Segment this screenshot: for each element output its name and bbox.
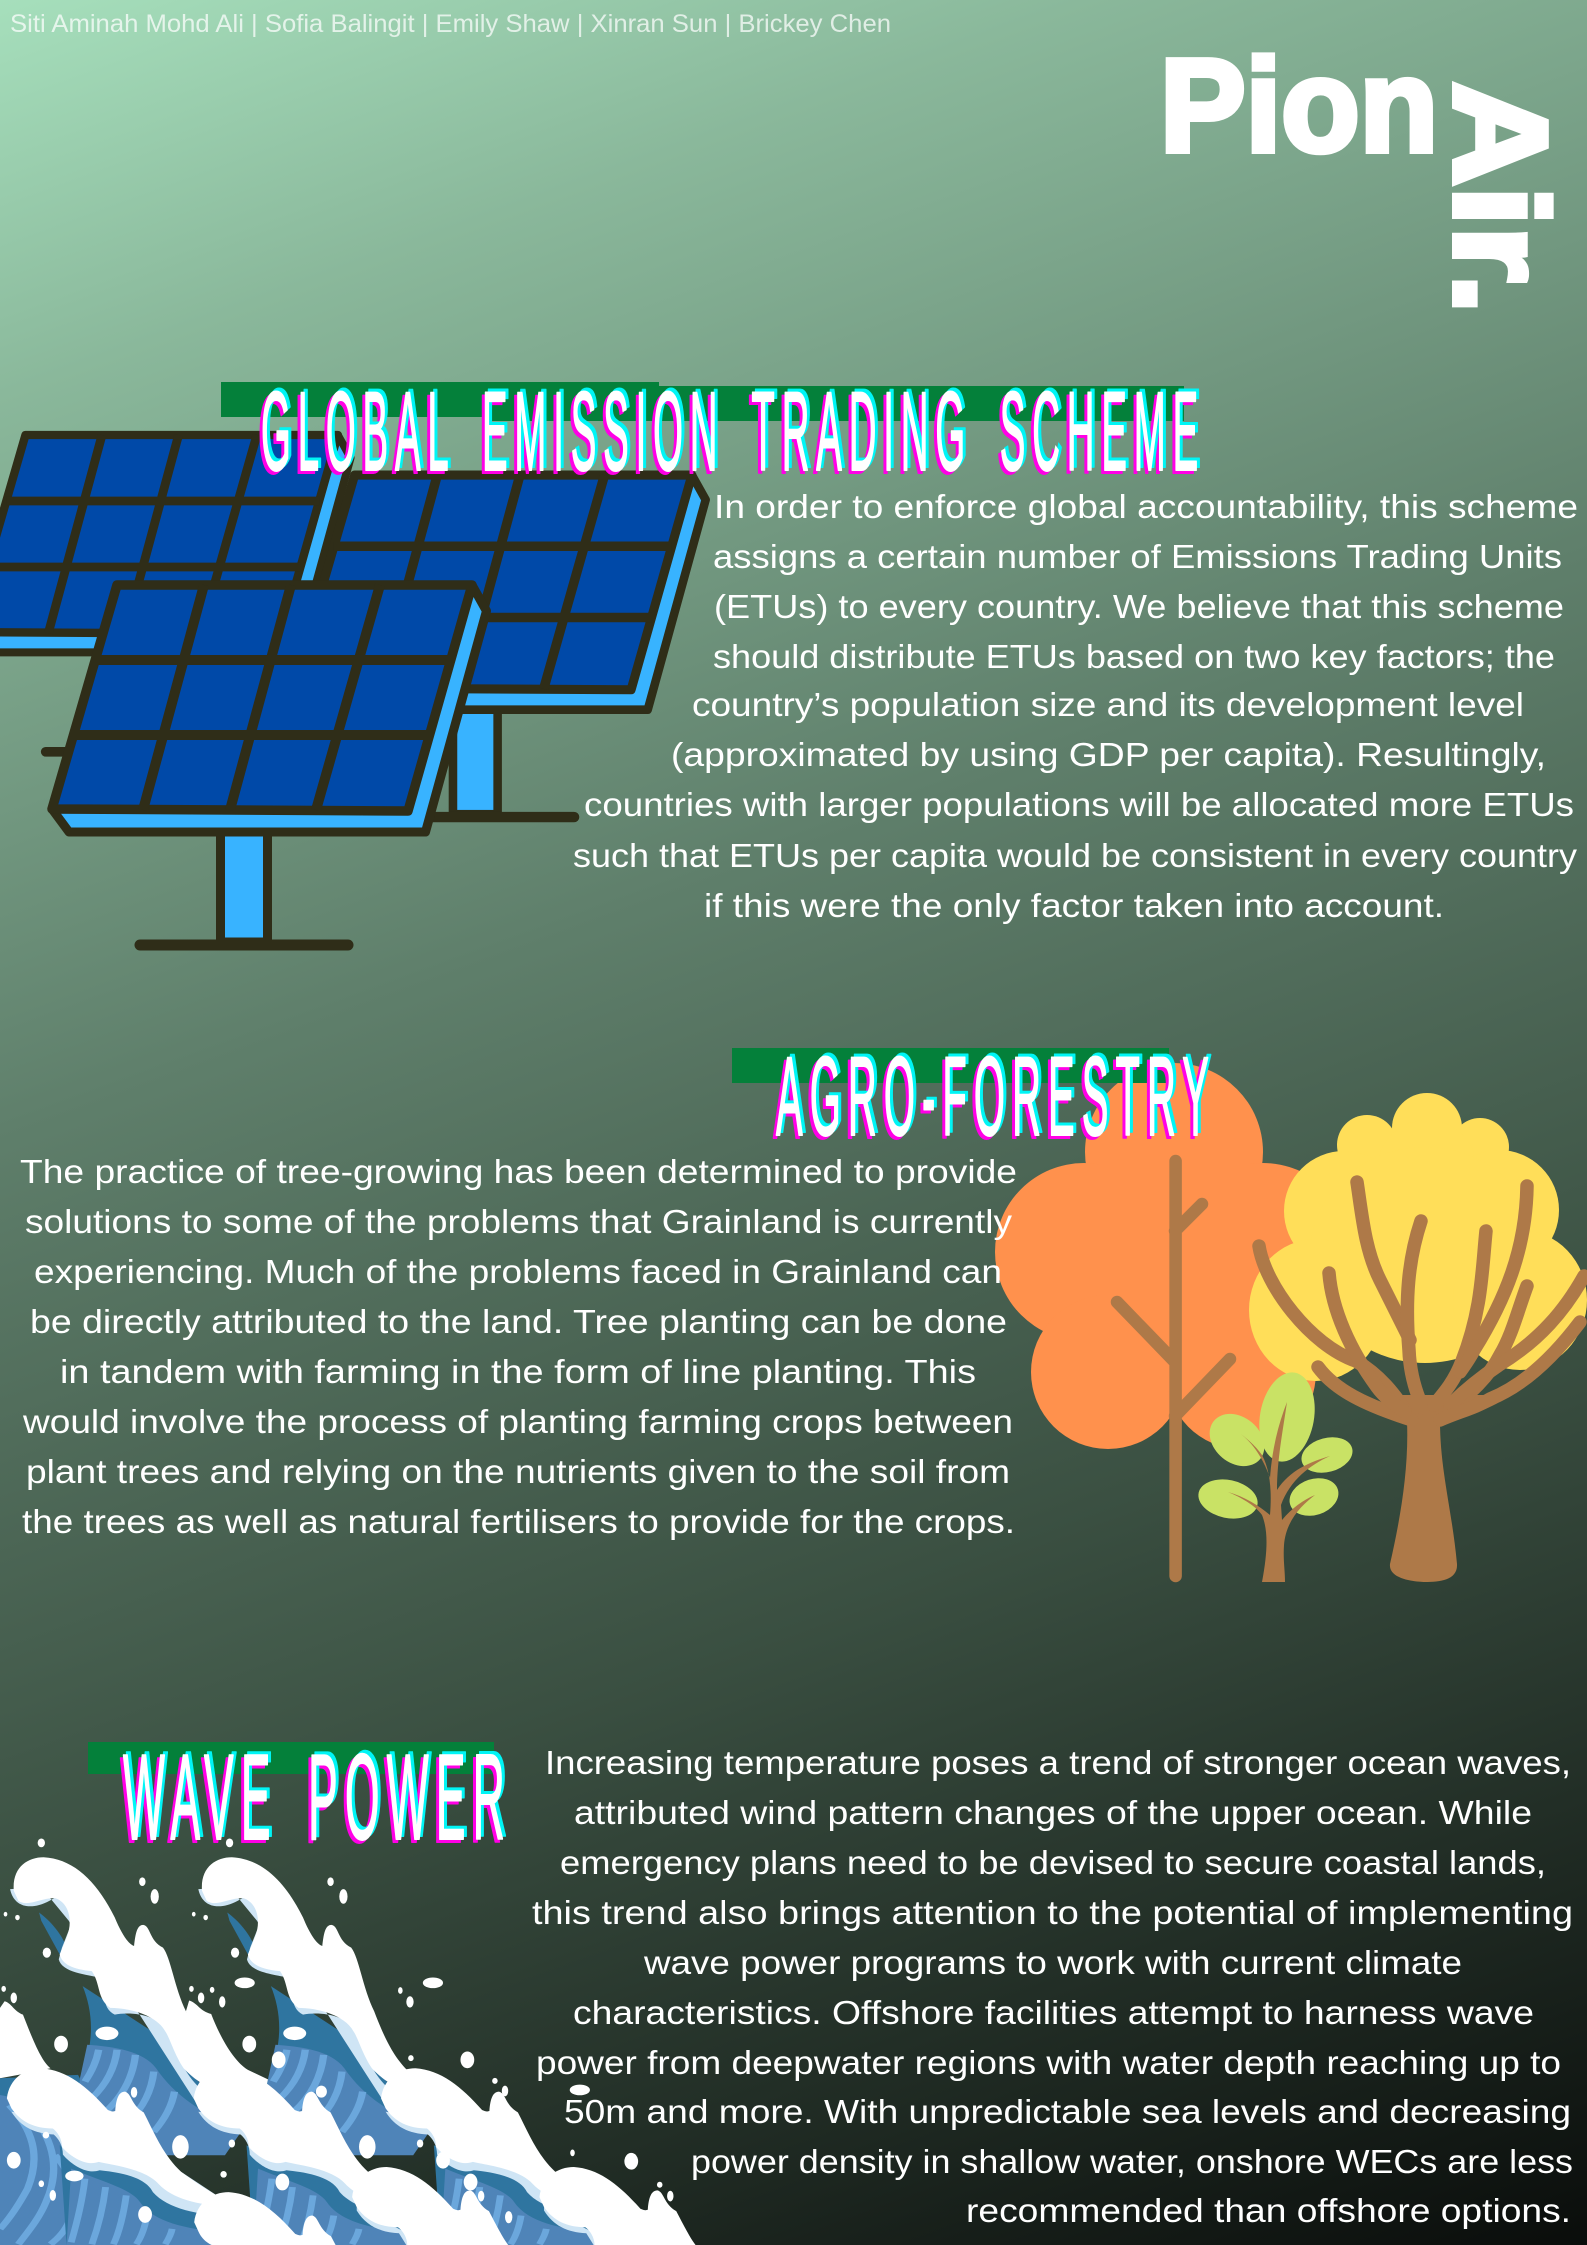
section 1 body text: assigns a certain number of Emissions Trading Units — [713, 538, 1562, 575]
front solar panel — [52, 585, 486, 945]
section 2 body text: be directly attributed to the land. Tree planting can be done — [30, 1303, 1007, 1340]
small plant — [1195, 1368, 1357, 1582]
section 3 body text: characteristics. Offshore facilities attempt to harness wave — [573, 1994, 1534, 2031]
section 1 body text: (ETUs) to every country. We believe that this scheme — [714, 588, 1564, 625]
section 1 body text: countries with larger populations will be allocated more ETUs — [584, 786, 1574, 823]
yellow tree — [1249, 1093, 1587, 1582]
text: WAVE POWER — [123, 1729, 512, 1865]
section 1 body text: (approximated by using GDP per capita). Resultingly, — [671, 736, 1546, 773]
section 3 body text — [532, 1744, 1573, 2229]
illustration: ocean waves — [0, 1839, 696, 2245]
section 3 body text: power density in shallow water, onshore WECs are less — [691, 2143, 1573, 2180]
section 1 heading bar — [221, 382, 1184, 421]
back right solar panel — [293, 475, 706, 817]
section 2 body text: in tandem with farming in the form of line planting. This — [60, 1353, 976, 1390]
section 3 body text: emergency plans need to be devised to secure coastal lands, — [560, 1844, 1546, 1881]
section 1 body text: In order to enforce global accountability, this scheme — [714, 488, 1578, 525]
section 1 body text — [573, 488, 1578, 924]
section 3 body text: power from deepwater regions with water depth reaching up to — [536, 2044, 1561, 2081]
section 1 body text: if this were the only factor taken into account. — [704, 887, 1444, 924]
section 2 body text: the trees as well as natural fertilisers to provide for the crops. — [22, 1503, 1015, 1540]
section 2 body text — [20, 1153, 1017, 1540]
text: WAVE POWER — [126, 1726, 515, 1862]
orange tree — [995, 1063, 1352, 1576]
section 3 body text: this trend also brings attention to the potential of implementing — [532, 1894, 1573, 1931]
section 2 body text: would involve the process of planting farming crops between — [22, 1403, 1013, 1440]
section 3 heading bar — [88, 1742, 494, 1774]
logo title: PionAir. — [1160, 32, 1574, 314]
section 2 body text: experiencing. Much of the problems faced in Grainland can — [34, 1253, 1002, 1290]
logo word: Pion: Pion — [1160, 32, 1438, 179]
illustration: solar panels — [0, 435, 706, 945]
section 3 body text: attributed wind pattern changes of the upper ocean. While — [574, 1794, 1532, 1831]
section 2 body text: The practice of tree-growing has been determined to provide — [20, 1153, 1017, 1190]
logo word: Air. rotated: Air. — [1427, 82, 1574, 314]
section 2 body text: plant trees and relying on the nutrients given to the soil from — [26, 1453, 1010, 1490]
section 2 heading bar — [732, 1048, 1169, 1083]
section 3 body text: 50m and more. With unpredictable sea levels and decreasing — [564, 2093, 1571, 2130]
section 3 body text: recommended than offshore options. — [966, 2192, 1571, 2229]
text: WAVE POWER — [120, 1732, 509, 1868]
illustration: trees — [995, 1063, 1587, 1582]
authors line: Siti Aminah Mohd Ali | Sofia Balingit | Emily Shaw | Xinran Sun | Brickey Chen — [10, 10, 891, 38]
section 2 heading — [773, 1031, 1219, 1162]
section 3 body text: wave power programs to work with current climate — [643, 1944, 1462, 1981]
section 1 body text: country’s population size and its development level — [692, 686, 1524, 723]
section 1 body text: such that ETUs per capita would be consistent in every country — [573, 837, 1578, 874]
section 2 body text: solutions to some of the problems that Grainland is currently — [25, 1203, 1013, 1240]
section 1 body text: should distribute ETUs based on two key factors; the — [713, 638, 1555, 675]
section 3 heading — [120, 1726, 515, 1868]
section 1 heading — [258, 366, 1208, 497]
back left solar panel — [0, 435, 351, 752]
section 3 body text: Increasing temperature poses a trend of stronger ocean waves, — [545, 1744, 1571, 1781]
